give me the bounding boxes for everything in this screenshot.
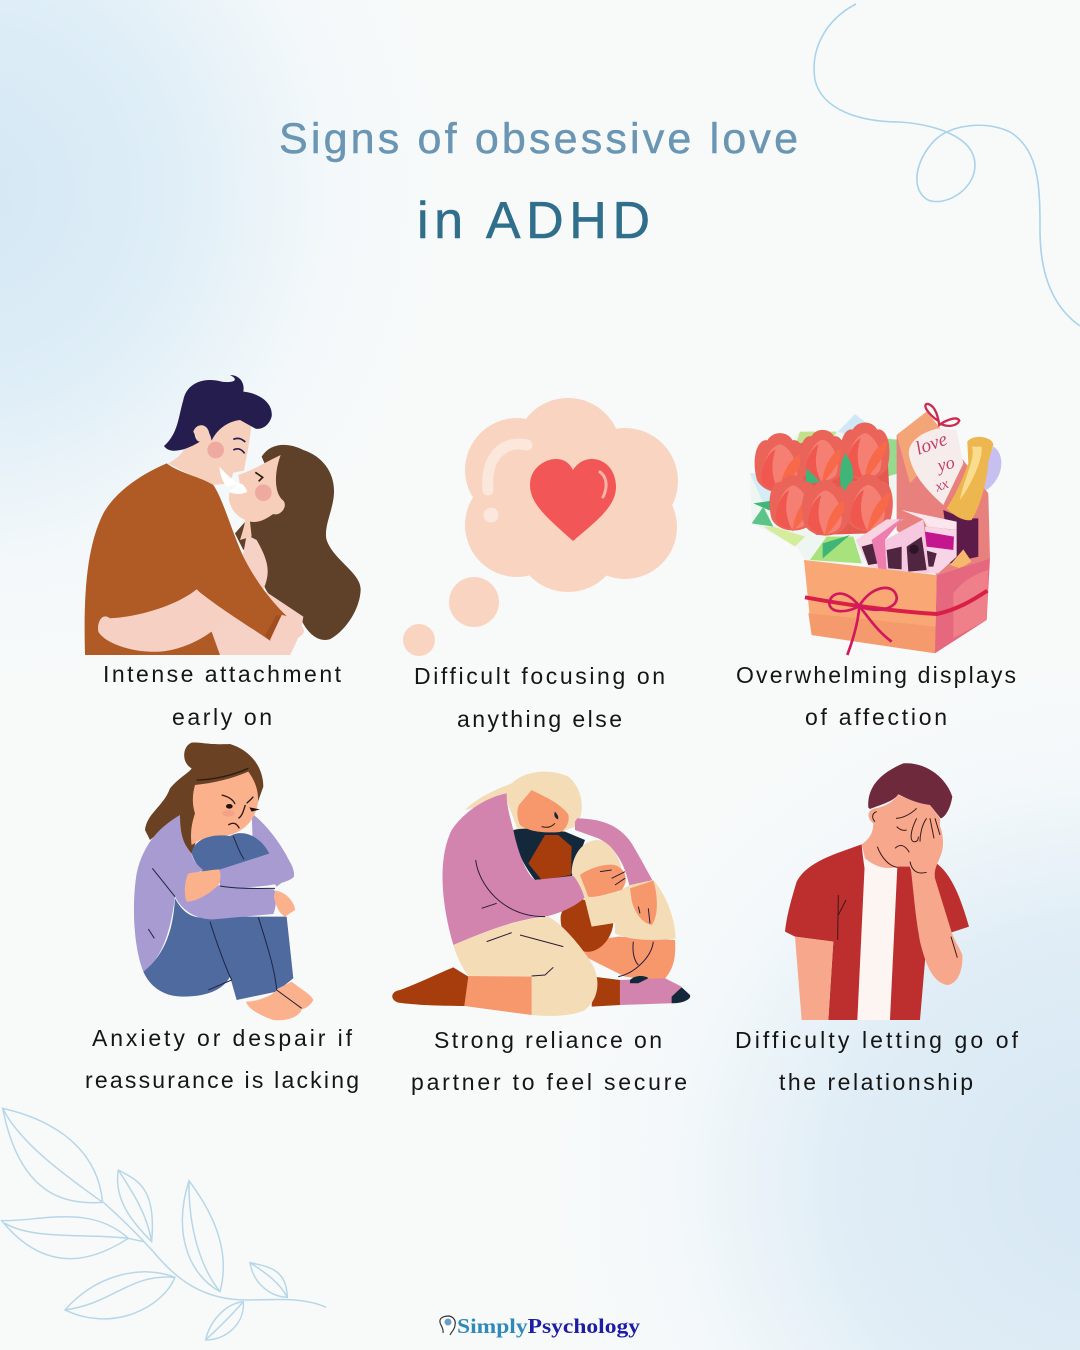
- logo icon: head with brain: [440, 1316, 455, 1335]
- woman's top: [203, 535, 303, 655]
- love note tag: love: [913, 429, 951, 460]
- caption: strong reliance: Strong reliance on: [434, 1027, 662, 1053]
- illustration: women embracing on floor: [392, 772, 690, 1016]
- hand on knee: [630, 881, 657, 925]
- red shirt right: [890, 862, 969, 1020]
- trailing bubbles: [449, 577, 499, 627]
- caption: anxiety or despair: Anxiety or despair if: [92, 1025, 353, 1051]
- caption: difficult focusing: Difficult focusing on: [414, 663, 665, 689]
- decorative leaf branch: [2, 1108, 326, 1340]
- ribbon: [805, 591, 987, 614]
- woman's face: [229, 455, 285, 540]
- logo: Simply Psychology: [440, 1314, 640, 1338]
- caption: intense attachment: Intense attachment: [103, 661, 342, 687]
- back sleeve: [575, 818, 653, 888]
- back legs: [563, 937, 675, 982]
- caption: difficult focusing: [414, 663, 665, 732]
- love note tag: [909, 404, 963, 505]
- face: [517, 790, 570, 832]
- facial and fold lines: [838, 808, 957, 958]
- cream trousers right: [615, 880, 676, 940]
- caption: difficult focusing: anything else: [457, 706, 622, 732]
- chocolate boxes: [902, 510, 957, 530]
- cream trousers front: [453, 917, 597, 1016]
- love note tag: yo: [933, 452, 957, 476]
- illustration: embracing couple: [85, 375, 361, 655]
- sweater body: [134, 815, 220, 972]
- box front: [804, 560, 937, 653]
- front hand: [580, 865, 626, 897]
- yellow box: [950, 549, 972, 568]
- illustration: man with hand on face: [785, 763, 969, 1020]
- title: [279, 115, 798, 250]
- lilac balloon: [978, 447, 1001, 490]
- red shirt left: [785, 844, 869, 1020]
- caption: strong reliance: [411, 1027, 687, 1095]
- caption: overwhelming displays: [736, 662, 1016, 730]
- rust inner leg: [561, 899, 613, 952]
- caption: overwhelming displays: Overwhelming displays: [736, 662, 1016, 688]
- hair: [465, 772, 582, 832]
- illustration: gift box with tulips: [750, 404, 1001, 655]
- white tee: [857, 858, 897, 1020]
- caption: difficulty letting go: Difficulty letting go of: [735, 1027, 1019, 1053]
- illustration: thought bubble with heart: [403, 398, 678, 656]
- heart: [530, 459, 616, 541]
- tulips: [755, 433, 805, 493]
- arm over knees: [218, 851, 294, 887]
- man's sweater: [85, 463, 287, 655]
- caption: anxiety or despair: [85, 1025, 359, 1093]
- embracing arm and hands: [98, 589, 227, 652]
- caption: difficulty letting go: the relationship: [779, 1069, 973, 1095]
- bottle: [943, 510, 978, 563]
- knees: [192, 833, 277, 873]
- back of box: [897, 412, 990, 575]
- left arm: [795, 937, 833, 1020]
- hair: [868, 763, 952, 818]
- ribbon bow: [829, 588, 897, 655]
- shin orange: [464, 976, 532, 1015]
- feet: [246, 982, 313, 1020]
- cream knee pad: [572, 840, 622, 927]
- caption: strong reliance: partner to feel secure: [411, 1069, 687, 1095]
- caption: difficulty letting go: [735, 1027, 1019, 1095]
- hands: [185, 869, 220, 902]
- far sleeve: [252, 813, 294, 887]
- hair: [145, 742, 263, 854]
- hair front lock: [532, 788, 580, 832]
- man's hair: [164, 375, 272, 451]
- decorative swirl line: [814, 4, 1080, 326]
- caption: overwhelming displays: of affection: [805, 704, 947, 730]
- clothing lines: [148, 836, 302, 1008]
- caption: intense attachment: early on: [172, 704, 272, 730]
- caption: intense attachment: [103, 661, 342, 730]
- title line one: Signs of obsessive love: [279, 115, 798, 163]
- logo wordmark: Simply Psychology: [457, 1314, 640, 1338]
- woman's hair back: [235, 445, 361, 640]
- love note tag: xx: [932, 476, 951, 496]
- inner figure dark top: [513, 829, 585, 880]
- pink body: [442, 793, 588, 945]
- man's head and neck: [168, 418, 252, 485]
- foot rust: [392, 967, 468, 1006]
- raised arm and hand: [910, 815, 962, 985]
- illustration: sad woman hugging knees: [134, 742, 313, 1020]
- man's ear: [193, 425, 209, 441]
- face and neck: [191, 772, 258, 845]
- pants: [143, 898, 293, 1000]
- title line two: in ADHD: [417, 192, 650, 250]
- wrapping paper: [750, 415, 913, 563]
- face and neck: [862, 795, 940, 868]
- box side: [935, 558, 990, 653]
- sketch lines: [476, 860, 653, 977]
- cloud highlights: [488, 444, 527, 490]
- tulip mass: [763, 440, 889, 535]
- thought cloud: [465, 398, 678, 592]
- caption: anxiety or despair: reassurance is lacking: [85, 1067, 359, 1093]
